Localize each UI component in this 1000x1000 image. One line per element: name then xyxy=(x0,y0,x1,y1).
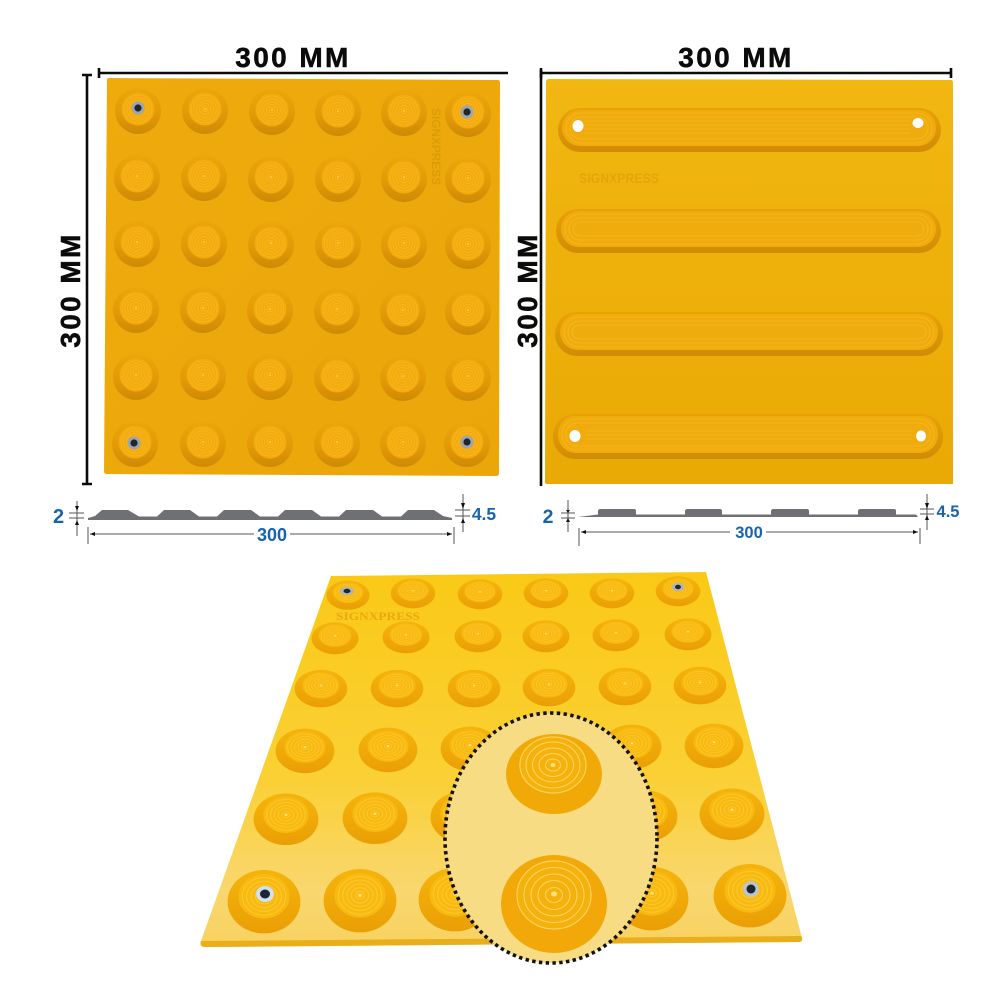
label: 300: 300 xyxy=(257,525,287,545)
dimension: panel 2 top width xyxy=(541,42,951,78)
embossed brand: SIGNXPRESS xyxy=(336,609,420,623)
brand mark: SIGNXPRESS xyxy=(579,170,659,186)
profile diagram: dome tile xyxy=(53,494,496,545)
measurement lines xyxy=(69,494,470,544)
cross-section xyxy=(88,510,452,520)
bar 3 xyxy=(555,312,943,356)
dimension: panel 2 left height: 300 MM xyxy=(512,232,543,348)
label: 4.5: 4.5 xyxy=(472,504,496,524)
dimension: panel 2 top width: 300 MM xyxy=(678,42,794,73)
dotted outline xyxy=(445,713,657,963)
label: 300: 300 xyxy=(735,524,763,542)
dimension: panel 1 left height: 300 MM xyxy=(55,232,86,348)
embossed brand: SIGNXPRESS xyxy=(429,108,443,185)
bar 1 xyxy=(558,108,941,152)
mounting bolts xyxy=(256,583,759,902)
label: 4.5: 4.5 xyxy=(937,503,959,521)
panel: truncated dome tile xyxy=(104,78,500,476)
measurement lines xyxy=(561,494,934,546)
panel: perspective photo of tile xyxy=(200,572,802,947)
enlarged dome: top xyxy=(506,734,602,814)
profile diagram: bar tile xyxy=(543,494,959,546)
dimension: panel 1 top width: 300 MM xyxy=(235,42,351,73)
label: 2: 2 xyxy=(53,506,64,528)
perspective domes xyxy=(228,576,786,933)
magnifier lens xyxy=(445,713,657,963)
enlarged dome: bottom xyxy=(501,855,607,953)
dimension: panel 1 top width xyxy=(99,42,508,78)
panel: directional bar tile xyxy=(545,79,953,484)
cross-section xyxy=(578,509,918,517)
label: 2: 2 xyxy=(543,506,554,528)
dimension: panel 1 left height xyxy=(55,75,92,484)
dome grid xyxy=(112,88,491,467)
bar 4 xyxy=(553,414,943,459)
mounting bolts xyxy=(128,102,474,450)
bar 2 xyxy=(556,209,941,253)
